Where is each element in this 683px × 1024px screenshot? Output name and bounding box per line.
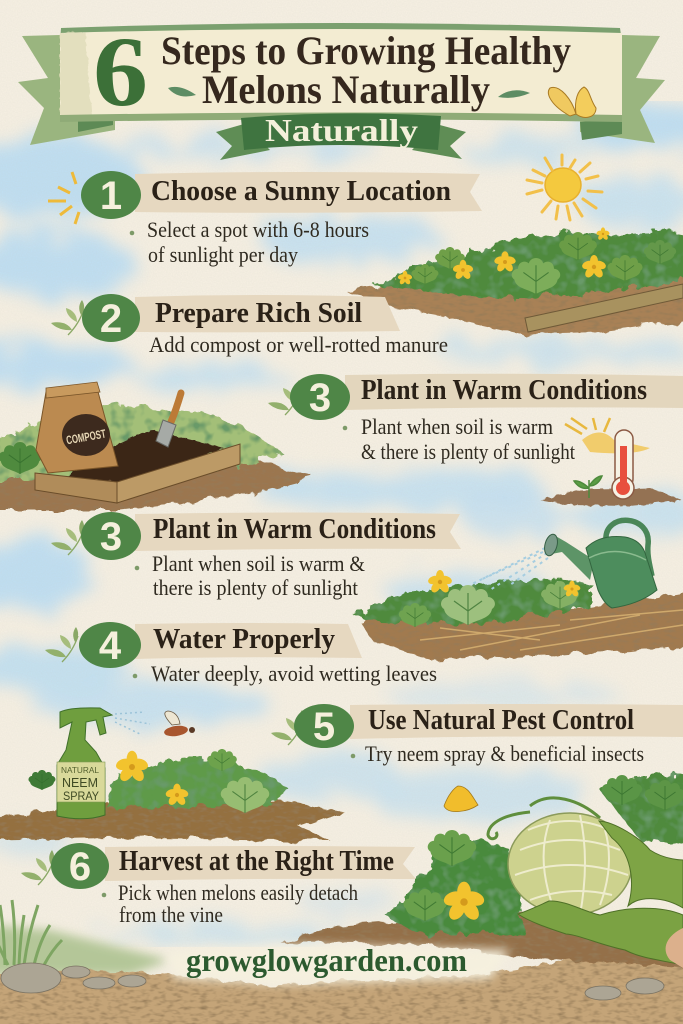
bullet <box>351 754 355 758</box>
step 3 lower <box>51 512 461 600</box>
heading: Water Properly <box>153 623 335 655</box>
trowel <box>156 393 181 447</box>
lower glove <box>518 901 683 965</box>
bullet <box>135 566 139 570</box>
large numeral 6: 6 <box>93 16 148 127</box>
body text: Plant when soil is warm <box>361 414 553 439</box>
number badge: 3 <box>100 515 122 559</box>
icon: right title leaf <box>498 90 530 98</box>
ribbon body <box>241 113 441 150</box>
heading: Plant in Warm Conditions <box>153 513 436 545</box>
body text: Water deeply, avoid wetting leaves <box>151 661 437 686</box>
side plant <box>0 442 42 474</box>
body text: Select a spot with 6-8 hours <box>147 217 369 242</box>
soil mound <box>540 488 682 506</box>
body text: of sunlight per day <box>148 242 298 267</box>
step 6 <box>21 843 416 927</box>
illustration: compost bag and raised bed <box>0 382 315 510</box>
website footer: growglowgarden.com <box>186 942 467 978</box>
soil <box>280 912 683 975</box>
neem spray bottle: NEEM <box>62 775 98 790</box>
ground <box>0 455 315 510</box>
ribbon <box>135 512 461 551</box>
flowers <box>115 751 189 807</box>
flowers <box>427 570 581 598</box>
green subtitle ribbon <box>216 112 466 160</box>
banner parchment <box>60 29 622 118</box>
number badge <box>51 843 109 889</box>
body text: from the vine <box>119 902 223 927</box>
upper glove <box>599 821 683 908</box>
soil <box>345 268 683 334</box>
body text: Add compost or well-rotted manure <box>149 332 448 357</box>
banner right tails <box>580 35 665 143</box>
icon: sprig <box>268 380 301 415</box>
ribbon <box>135 172 482 213</box>
banner worn left edge <box>60 32 92 118</box>
bullet <box>133 674 137 678</box>
number badge <box>294 704 354 749</box>
illustration: sun, thermometer and seedling <box>540 418 682 506</box>
ribbon tails <box>216 124 466 160</box>
icon: sun rays <box>48 172 79 224</box>
melon flower <box>442 882 486 923</box>
small sun rays <box>565 418 610 434</box>
heading: Prepare Rich Soil <box>155 297 362 329</box>
body text <box>152 551 365 600</box>
background shrubs <box>0 405 282 480</box>
left greens <box>0 925 170 975</box>
number badge <box>290 374 350 420</box>
water spray <box>470 548 548 590</box>
heading: Choose a Sunny Location <box>151 175 451 207</box>
number badge <box>81 171 141 219</box>
icon: sprig <box>21 850 54 885</box>
number badge: 5 <box>313 705 335 749</box>
body text <box>361 414 575 464</box>
number badge: 1 <box>100 174 122 218</box>
body text: there is plenty of sunlight <box>153 575 358 600</box>
stones <box>1 963 664 1000</box>
soil pile <box>62 430 224 482</box>
body text <box>118 880 358 927</box>
soil <box>0 800 345 842</box>
heading: Plant in Warm Conditions <box>361 374 647 406</box>
step 5 <box>271 704 683 766</box>
body text: & there is plenty of sunlight <box>361 439 575 464</box>
straw texture <box>420 610 683 650</box>
body text <box>147 217 369 267</box>
number badge <box>82 294 140 342</box>
icon: large sun <box>527 155 602 220</box>
raised bed front walls <box>35 473 117 503</box>
icon: sprig <box>271 710 304 745</box>
ribbon <box>350 704 683 739</box>
ribbon word: Naturally <box>265 112 418 148</box>
foliage <box>352 578 590 627</box>
spray mist <box>115 712 150 734</box>
bottom soil <box>0 960 683 1024</box>
foliage <box>372 232 683 298</box>
body text: Try neem spray & beneficial insects <box>365 741 644 766</box>
heading: Harvest at the Right Time <box>119 845 394 877</box>
title line 2: Melons Naturally <box>202 67 490 112</box>
compost bag: COMPOST <box>65 427 107 447</box>
number badge <box>79 622 141 668</box>
compost bag <box>36 382 118 473</box>
step 3 upper <box>268 374 683 464</box>
icon: sprig <box>45 627 78 662</box>
neem spray bottle: NATURAL <box>61 765 99 775</box>
step 2 <box>51 294 448 357</box>
illustration: melon plants in bed <box>345 227 683 334</box>
flowers <box>397 227 610 285</box>
mulch soil <box>360 590 683 660</box>
ribbon <box>105 846 416 881</box>
illustration: watering can over plants <box>352 520 683 660</box>
small sun disc and cloud <box>582 432 650 453</box>
watering can <box>542 520 657 608</box>
thermometer <box>612 430 634 499</box>
bullet <box>130 231 134 235</box>
ribbon <box>135 295 400 332</box>
banner left tails <box>18 35 115 145</box>
melon <box>508 813 632 915</box>
foliage behind melon <box>385 774 683 935</box>
title banner <box>18 16 665 160</box>
banner top edge <box>60 23 622 42</box>
butterfly <box>444 786 478 812</box>
body text: Plant when soil is warm & <box>152 551 365 576</box>
title line 1: Steps to Growing Healthy <box>161 28 571 73</box>
icon: left title leaf <box>168 87 196 96</box>
banner bottom edge <box>60 112 622 122</box>
ribbon <box>135 623 362 659</box>
bullet <box>343 426 347 430</box>
heading: Use Natural Pest Control <box>368 704 634 736</box>
number badge: 4 <box>99 624 122 668</box>
illustration: neem spray and plants <box>0 708 345 842</box>
wrist <box>666 928 683 968</box>
number badge: 2 <box>100 297 122 341</box>
icon: butterfly <box>548 87 596 117</box>
neem spray bottle <box>57 708 112 819</box>
body text: Pick when melons easily detach <box>118 880 358 905</box>
insect <box>163 711 195 738</box>
foliage <box>29 749 290 813</box>
grass blades <box>0 900 62 965</box>
ribbon <box>345 374 683 410</box>
neem spray bottle: SPRAY <box>63 789 99 803</box>
icon: sprig <box>51 520 84 555</box>
icon: sprig <box>51 300 84 335</box>
footer parchment strip <box>165 945 510 984</box>
number badge: 3 <box>309 376 331 420</box>
seedling <box>574 476 602 498</box>
vine <box>488 798 600 839</box>
step 1 <box>48 171 482 267</box>
number badge <box>81 512 141 560</box>
banner tail folds <box>78 116 622 140</box>
wooden edge <box>525 284 683 332</box>
step 4 <box>45 622 437 686</box>
number badge: 6 <box>69 845 91 889</box>
bullet <box>102 893 106 897</box>
illustration: melon harvest <box>280 774 683 975</box>
ground and stones footer scene <box>0 900 683 1024</box>
